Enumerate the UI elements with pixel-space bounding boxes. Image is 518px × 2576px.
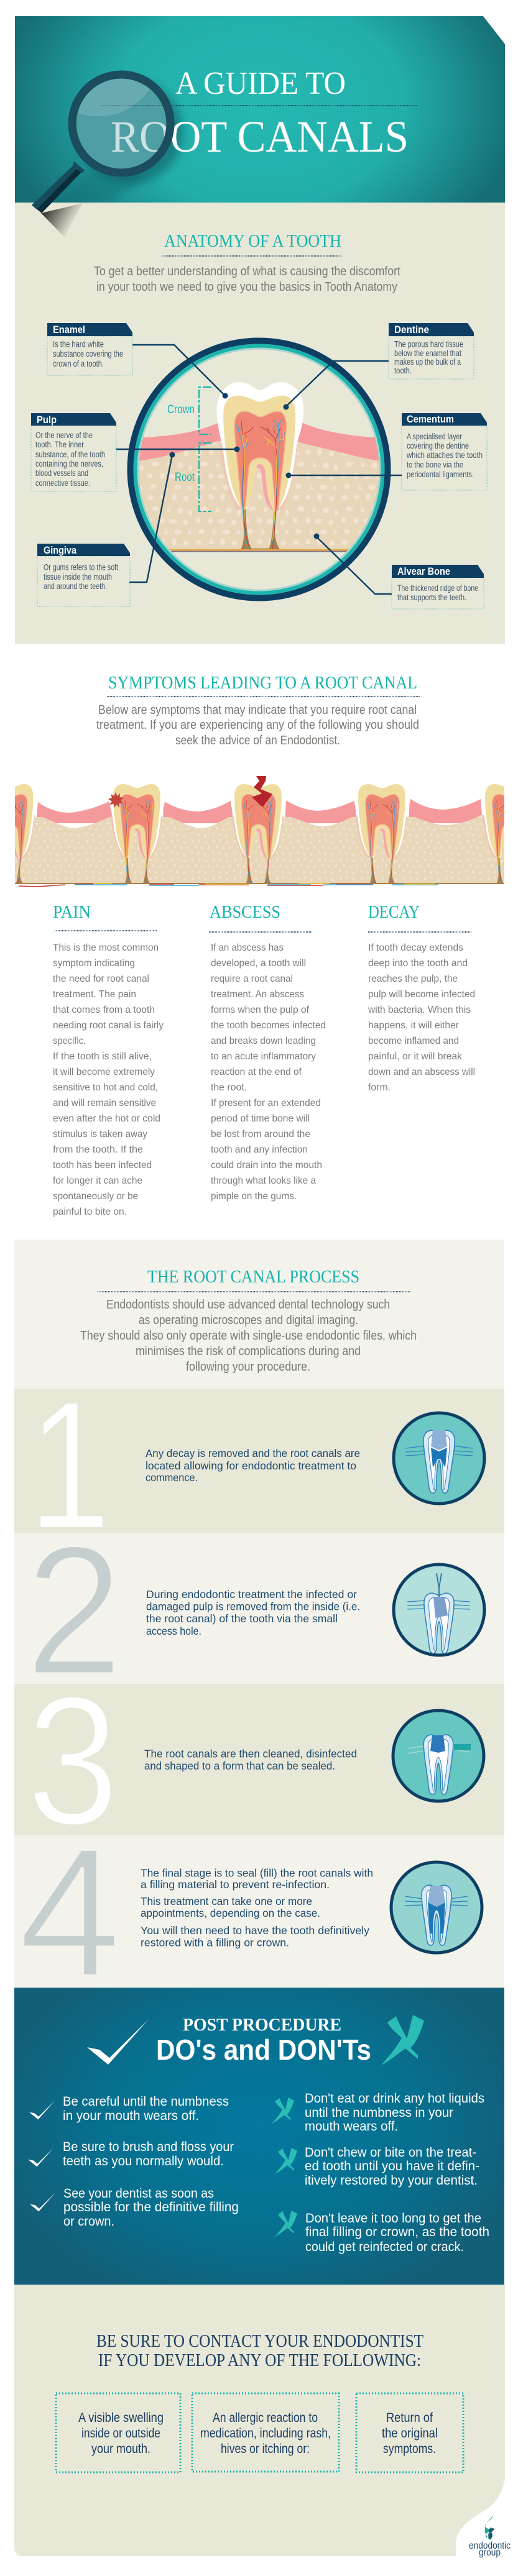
- don't item 3: [275, 2211, 489, 2254]
- label: dentine: tooth.: [394, 366, 412, 375]
- banner background: [15, 16, 505, 203]
- process intro text: following your procedure.: [186, 1360, 310, 1374]
- column: abscess: forms when the pulp of: [211, 1005, 310, 1015]
- box: allergic reaction: [192, 2393, 339, 2472]
- don't item 3: Don't leave it too long to get the: [305, 2211, 481, 2226]
- don't item 1: until the numbness in your: [305, 2106, 453, 2120]
- box: allergic reaction: An allergic reaction to: [213, 2411, 318, 2425]
- icon: filled tooth: [391, 1862, 482, 1953]
- column: pain: and will remain sensitive: [53, 1098, 156, 1108]
- icon: tooth crack: [252, 776, 272, 806]
- label: gingiva: Or gums refers to the soft: [44, 563, 118, 572]
- heading: do's and don'ts: DO's and DON'Ts: [156, 2034, 371, 2066]
- label: cementum: to the bone via the: [407, 460, 463, 470]
- do item 1: [29, 2094, 229, 2123]
- column: pain: it will become extremely: [53, 1067, 155, 1077]
- symptoms intro text: treatment. If you are experiencing any of the following you should: [96, 718, 419, 732]
- do item 2: [28, 2140, 234, 2168]
- column: pain: the need for root canal: [53, 974, 149, 984]
- box: swelling: [56, 2393, 180, 2472]
- column: abscess: pimple on the gums.: [211, 1191, 297, 1202]
- step 3: [14, 1658, 504, 1863]
- column: abscess: [209, 903, 326, 1202]
- label: gingiva: [37, 544, 130, 606]
- process intro text: minimises the risk of complications during and: [136, 1345, 361, 1358]
- panel: anatomy of a tooth: [15, 203, 505, 644]
- column: abscess: ABSCESS: [210, 903, 280, 922]
- label: alvear bone: [392, 565, 484, 609]
- label: alvear bone: The thickened ridge of bone: [397, 583, 478, 593]
- column: abscess: period of time bone will: [211, 1113, 310, 1124]
- label: enamel: crown of a tooth.: [53, 359, 104, 368]
- box: swelling: inside or outside: [81, 2426, 160, 2441]
- magnifier rim: [72, 75, 170, 173]
- panel background: [14, 1988, 504, 2285]
- column: pain: specific.: [53, 1036, 86, 1046]
- column: decay: form.: [368, 1082, 391, 1093]
- column: decay: happens, it will either: [368, 1020, 460, 1031]
- handle shadow on panel: [41, 203, 83, 237]
- heading: anatomy: ANATOMY OF A TOOTH: [164, 232, 341, 251]
- label: dentine: below the enamel that: [394, 349, 461, 358]
- label: cementum: Cementum: [407, 413, 454, 425]
- label: pulp: Pulp: [37, 414, 57, 426]
- step 1 text: Any decay is removed and the root canals are: [146, 1447, 360, 1459]
- column: pain: painful to bite on.: [53, 1207, 127, 1217]
- do item 3: or crown.: [63, 2214, 114, 2229]
- step 3 text: The root canals are then cleaned, disinfected: [144, 1747, 357, 1760]
- heading: process: THE ROOT CANAL PROCESS: [147, 1267, 359, 1287]
- panel: root canal process intro: [14, 1240, 504, 1389]
- step 4 text: appointments, depending on the case.: [141, 1907, 320, 1919]
- contact heading: IF YOU DEVELOP ANY OF THE FOLLOWING:: [98, 2350, 421, 2370]
- step 2 text: During endodontic treatment the infected or: [146, 1588, 357, 1601]
- label: enamel: substance covering the: [53, 349, 123, 359]
- label: pulp: connective tissue.: [35, 478, 90, 488]
- don't item 2: ed tooth until you have it defin-: [305, 2159, 479, 2173]
- label: cementum: A specialised layer: [407, 432, 462, 441]
- label: pulp: Or the nerve of the: [35, 431, 93, 440]
- heading: symptoms: SYMPTOMS LEADING TO A ROOT CANAL: [108, 674, 417, 693]
- step 1 text: commence.: [146, 1471, 198, 1484]
- column: pain: for longer it can ache: [53, 1176, 142, 1186]
- column: pain: needing root canal is fairly: [53, 1020, 164, 1031]
- column: abscess: to an acute inflammatory: [211, 1051, 316, 1062]
- column: decay: down and an abscess will: [368, 1067, 475, 1077]
- don't item 2: itively restored by your dentist.: [305, 2173, 478, 2188]
- crown label and bracket: Crown: [167, 403, 195, 416]
- column: pain: treatment. The pain: [53, 989, 136, 1000]
- panel: contact your endodontist: [14, 2285, 505, 2556]
- column: pain: tooth has been infected: [53, 1160, 152, 1171]
- label: cementum: [402, 413, 487, 490]
- crown label and bracket: [167, 387, 211, 434]
- column: abscess: If present for an extended: [211, 1098, 321, 1108]
- label: dentine: Dentine: [394, 324, 429, 336]
- label: pulp: containing the nerves,: [35, 459, 103, 468]
- column: pain: sensitive to hot and cold,: [53, 1082, 158, 1093]
- column: pain: [53, 903, 164, 1217]
- box: swelling: your mouth.: [91, 2442, 150, 2456]
- step 2 text: access hole.: [146, 1625, 201, 1637]
- label: alvear bone: Alvear Bone: [397, 565, 450, 577]
- label: alvear bone: that supports the teeth.: [397, 593, 466, 602]
- label: gingiva: tissue inside the mouth: [44, 572, 112, 582]
- step 4 text: The final stage is to seal (fill) the root canals with: [141, 1866, 373, 1879]
- label: gingiva: and around the teeth.: [44, 582, 107, 591]
- icon: decay spot: [108, 792, 124, 808]
- label: pulp: tooth. The inner: [35, 440, 84, 449]
- icon: cleaned tooth: [393, 1710, 484, 1801]
- symptoms intro text: Below are symptoms that may indicate that you require root canal: [98, 703, 417, 717]
- label: enamel: Enamel: [53, 324, 85, 336]
- box: allergic reaction: medication, including rash,: [200, 2426, 331, 2441]
- don't item 1: [272, 2091, 484, 2134]
- teeth cross-section strip: [15, 784, 504, 887]
- column: decay: painful, or it will break: [368, 1051, 463, 1062]
- step 4 text: You will then need to have the tooth definitively: [141, 1924, 369, 1937]
- step 1 text: [146, 1447, 360, 1484]
- column: abscess: through what looks like a: [211, 1176, 316, 1186]
- label: enamel: Is the hard white: [53, 339, 104, 349]
- label: pulp: [31, 413, 116, 491]
- root label and bracket: [175, 443, 211, 511]
- do item 1: in your mouth wears off.: [63, 2109, 199, 2123]
- icon: large cross: [381, 2015, 424, 2065]
- magnifier shadow on banner: [56, 80, 183, 203]
- symptoms intro text: seek the advice of an Endodontist.: [175, 734, 340, 747]
- numeral 1: 1: [28, 1363, 111, 1568]
- column: abscess: could drain into the mouth: [211, 1160, 322, 1171]
- column: decay: become inflamed and: [368, 1036, 459, 1046]
- step 4 text: a filling material to prevent re-infection.: [141, 1878, 330, 1891]
- column: pain: stimulus is taken away: [53, 1129, 147, 1140]
- step 3 text: and shaped to a form that can be sealed.: [144, 1760, 335, 1772]
- process intro text: They should also only operate with single-use endodontic files, which: [80, 1329, 417, 1343]
- panel background: [14, 2285, 505, 2556]
- label: cementum: periodontal ligaments.: [407, 470, 474, 479]
- step 4 text: This treatment can take one or more: [141, 1895, 312, 1907]
- icon: tooth with file instrument: [394, 1564, 484, 1655]
- do item 3: See your dentist as soon as: [63, 2186, 214, 2201]
- step 2 text: the root canal) of the tooth via the small: [146, 1612, 338, 1625]
- numeral 4: 4: [19, 1809, 121, 2015]
- icon: tooth with access hole: [394, 1413, 484, 1504]
- label: dentine: [389, 323, 474, 379]
- column: abscess: reaction at the end of: [211, 1067, 302, 1077]
- lens highlight: [78, 78, 149, 117]
- do item 2: teeth as you normally would.: [63, 2154, 224, 2168]
- contact heading: [96, 2331, 423, 2370]
- column: pain: that comes from a tooth: [53, 1005, 155, 1015]
- logo mark: [485, 2515, 495, 2540]
- label: pulp: substance, of the tooth: [35, 450, 105, 459]
- don't item 3: could get reinfected or crack.: [305, 2240, 464, 2254]
- box: return of symptoms: [356, 2393, 463, 2472]
- anatomy background: [15, 203, 505, 644]
- box: return of symptoms: symptoms.: [383, 2442, 436, 2456]
- don't item 2: Don't chew or bite on the treat-: [305, 2145, 476, 2160]
- callout lines: [116, 345, 402, 594]
- step 4 text: [141, 1866, 373, 1948]
- column: abscess: be lost from around the: [211, 1129, 310, 1140]
- column: pain: spontaneously or be: [53, 1191, 138, 1202]
- numeral 2: 2: [25, 1508, 123, 1714]
- title line: A GUIDE TO: A GUIDE TO: [175, 66, 346, 101]
- do item 2: Be sure to brush and floss your: [63, 2140, 234, 2154]
- header banner: [15, 16, 505, 203]
- step 4: [14, 1809, 504, 2015]
- box: return of symptoms: the original: [382, 2426, 438, 2441]
- column: pain: This is the most common: [53, 943, 159, 953]
- don't item 3: final filling or crown, as the tooth: [305, 2225, 489, 2239]
- logo: endodontic group: group: [479, 2547, 501, 2558]
- tooth diagram: [134, 382, 384, 552]
- don't item 1: Don't eat or drink any hot liquids: [305, 2091, 484, 2106]
- step 1: [14, 1363, 504, 1568]
- anatomy intro text: in your tooth we need to give you the basics in Tooth Anatomy: [96, 280, 397, 294]
- column: pain: from the tooth. If the: [53, 1144, 143, 1155]
- root label and bracket: Root: [175, 471, 195, 484]
- box: return of symptoms: Return of: [386, 2411, 433, 2425]
- don't item 1: mouth wears off.: [305, 2119, 398, 2134]
- process intro text: [80, 1298, 417, 1374]
- column: abscess: the tooth becomes infected: [211, 1020, 326, 1031]
- do item 3: [30, 2186, 239, 2229]
- panel: post procedure do's and don'ts: [14, 1988, 504, 2285]
- panel: symptoms: [0, 674, 518, 887]
- box: swelling: A visible swelling: [78, 2411, 164, 2425]
- column: abscess: developed, a tooth will: [211, 958, 306, 969]
- column: abscess: and breaks down leading: [211, 1036, 316, 1046]
- column: decay: If tooth decay extends: [368, 943, 463, 953]
- symptoms intro text: [96, 703, 419, 747]
- column: pain: PAIN: [53, 903, 91, 922]
- step 2 text: damaged pulp is removed from the inside (i.e.: [146, 1601, 360, 1613]
- handle: [32, 161, 85, 213]
- lens glass: [76, 78, 167, 169]
- column: decay: reaches the pulp, the: [368, 974, 458, 984]
- column: abscess: treatment. An abscess: [211, 989, 304, 1000]
- do item 3: possible for the definitive filling: [63, 2200, 239, 2214]
- logo text: endodontic: [469, 2541, 511, 2551]
- numeral 3: 3: [27, 1658, 119, 1863]
- magnifier ring around tooth: [131, 340, 388, 598]
- column: abscess: If an abscess has: [211, 943, 284, 953]
- don't item 2: [275, 2145, 479, 2188]
- process intro text: Endodontists should use advanced dental technology such: [106, 1298, 390, 1312]
- column: abscess: tooth and any infection: [211, 1144, 308, 1155]
- label: pulp: blood vessels and: [35, 468, 88, 478]
- logo: endodontic group: [469, 2515, 511, 2558]
- magnifying glass: [32, 75, 170, 237]
- label: enamel: [47, 323, 132, 375]
- column: decay: DECAY: [368, 903, 420, 922]
- column: decay: pulp will become infected: [368, 989, 475, 1000]
- step 2: [14, 1508, 504, 1714]
- step 4 text: restored with a filling or crown.: [141, 1936, 289, 1948]
- column: decay: with bacteria. When this: [368, 1005, 471, 1015]
- column: pain: even after the hot or cold: [53, 1113, 160, 1124]
- anatomy intro text: [94, 265, 400, 294]
- column: decay: deep into the tooth and: [368, 958, 468, 969]
- icon: large check: [87, 2020, 148, 2065]
- anatomy intro text: To get a better understanding of what is causing the discomfort: [94, 265, 400, 278]
- column: abscess: the root.: [211, 1082, 247, 1093]
- label: dentine: makes up the bulk of a: [394, 357, 461, 367]
- column: decay: [368, 903, 475, 1093]
- process background: [14, 1240, 504, 1389]
- lens tint over title: [76, 78, 167, 169]
- step 3 text: [144, 1747, 357, 1772]
- process intro text: as operating microscopes and digital imaging.: [139, 1313, 358, 1327]
- title line: ROOT CANALS: ROOT CANALS: [111, 112, 409, 162]
- contact heading: BE SURE TO CONTACT YOUR ENDODONTIST: [96, 2331, 423, 2351]
- step 2 text: [146, 1588, 360, 1637]
- title divider: [101, 105, 418, 106]
- column: pain: symptom indicating: [53, 958, 135, 969]
- label: cementum: which attaches the tooth: [406, 450, 483, 460]
- do item 1: Be careful until the numbness: [63, 2094, 229, 2109]
- label: cementum: covering the dentine: [407, 441, 469, 450]
- box: allergic reaction: hives or itching or:: [221, 2442, 310, 2456]
- label: dentine: The porous hard tissue: [394, 339, 463, 349]
- column: pain: If the tooth is still alive,: [53, 1051, 152, 1062]
- step 1 text: located allowing for endodontic treatment to: [146, 1459, 356, 1472]
- label: gingiva: Gingiva: [44, 544, 76, 556]
- column: abscess: require a root canal: [211, 974, 293, 984]
- heading: post procedure: POST PROCEDURE: [183, 2015, 341, 2035]
